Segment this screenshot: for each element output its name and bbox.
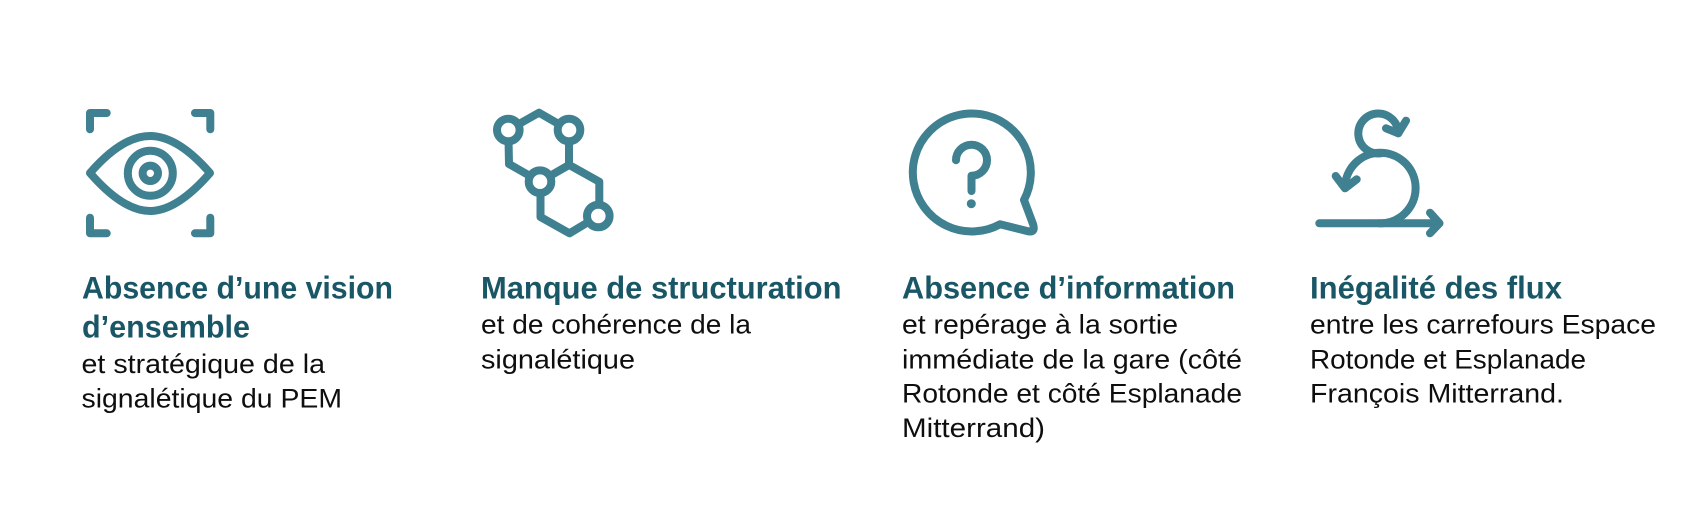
text: stratégique: et stratégique de la: [82, 349, 325, 379]
heading: manque de structuration: Manque de structuration: [481, 269, 842, 305]
text: repérage: [902, 309, 1242, 443]
heading: absence d'une vision d'ensemble: Absence d’une vision: [82, 269, 393, 305]
text: cohérence: signalétique: [481, 344, 635, 374]
text: cohérence: [481, 309, 751, 374]
text: repérage: Rotonde et côté Esplanade: [902, 379, 1242, 409]
text: stratégique: [82, 349, 342, 414]
heading: absence d'une vision d'ensemble: d’ensemble: [82, 308, 250, 344]
text: repérage: immédiate de la gare (côté: [902, 344, 1242, 374]
heading: absence d'information: Absence d’information: [902, 269, 1235, 305]
icon: looping arrows: [1319, 113, 1440, 233]
panel: structuration: [481, 113, 842, 374]
panel: information: [902, 113, 1242, 443]
panel: vision d'ensemble: [82, 113, 393, 414]
text: cohérence: et de cohérence de la: [481, 309, 751, 339]
panel: flux: [1310, 113, 1656, 409]
heading: inégalité des flux: Inégalité des flux: [1310, 269, 1562, 305]
heading: absence d'une vision d'ensemble: [82, 269, 393, 344]
text: carrefours: François Mitterrand.: [1310, 379, 1564, 409]
text: repérage: Mitterrand): [902, 413, 1045, 443]
text: carrefours: [1310, 309, 1656, 409]
text: stratégique: signalétique du PEM: [82, 384, 342, 414]
icon: eye in viewfinder: [90, 113, 210, 233]
icon: speech bubble with question mark: [913, 113, 1034, 232]
text: repérage: et repérage à la sortie: [902, 309, 1178, 339]
icon: linked hexagons: [497, 113, 610, 233]
text: carrefours: Rotonde et Esplanade: [1310, 344, 1586, 374]
text: carrefours: entre les carrefours Espace: [1310, 309, 1656, 339]
